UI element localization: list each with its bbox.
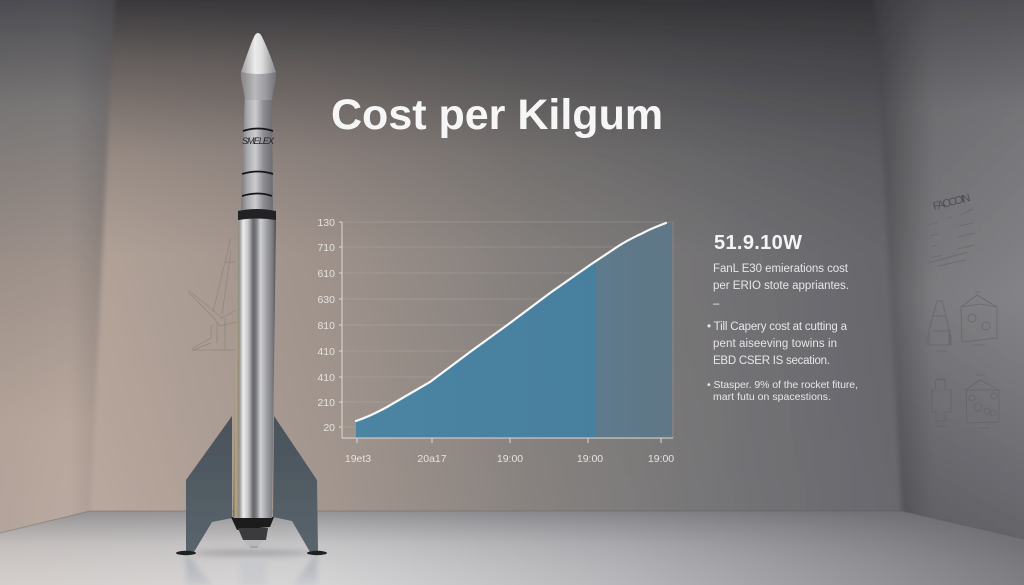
sketch: stage panel [966, 375, 999, 428]
summary text: – [713, 298, 720, 310]
faint blueprint sketch behind rocket [188, 238, 236, 350]
title: Cost per Kilgum [331, 91, 663, 139]
wall sketches on right [927, 192, 999, 428]
x axis labels: 19et3 [345, 453, 371, 465]
collar [238, 209, 276, 220]
sketch: engine panel [961, 292, 997, 345]
rocket reflection on floor [186, 550, 317, 585]
headline figure: 51.9.10W [714, 232, 802, 254]
summary text: FanL E30 emierations cost [713, 263, 849, 275]
side statistic and notes [707, 232, 858, 403]
sketch: capsule [932, 379, 951, 426]
falcon spec sheet [928, 192, 974, 266]
summary text [713, 263, 849, 310]
second bullet: • Stasper. 9% of the rocket fiture, [707, 379, 858, 391]
x axis labels: 19:00 [648, 453, 674, 465]
lighter forecast area [596, 222, 672, 438]
x axis labels: 19:00 [577, 453, 603, 465]
x axis labels: 20a17 [417, 453, 447, 465]
y axis labels: 710 [317, 242, 335, 254]
nose cone [241, 33, 276, 74]
y axis labels: 410 [317, 346, 335, 358]
main body [233, 218, 276, 518]
cost line chart [317, 217, 674, 465]
first bullet [707, 321, 848, 367]
rocket bands [242, 128, 273, 196]
y axis labels: 210 [317, 397, 335, 409]
second bullet: mart futu on spacestions. [713, 391, 831, 403]
first bullet: • Till Capery cost at cutting a [707, 321, 848, 333]
right fin [273, 416, 327, 555]
y axis labels: 410 [317, 372, 335, 384]
first bullet: EBD CSER IS secation. [713, 355, 830, 367]
nose base [241, 72, 276, 100]
y axis labels [317, 217, 335, 434]
grid lines [342, 222, 673, 438]
x axis labels: 19:00 [497, 453, 523, 465]
summary text: per ERIO stote appriantes. [713, 280, 849, 292]
rocket lettering: SMELEX [242, 136, 275, 146]
y axis labels: 630 [317, 294, 335, 306]
upper stage [241, 92, 273, 210]
left fin [176, 416, 232, 555]
x axis labels [345, 453, 674, 465]
y axis labels: 810 [317, 320, 335, 332]
engine nozzle [231, 517, 274, 548]
curve line [356, 223, 666, 421]
y axis labels: 20 [323, 422, 335, 434]
blue area fill [356, 261, 596, 438]
y axis labels: 130 [317, 217, 335, 229]
axes [339, 222, 673, 443]
sketch: rocket stage [927, 301, 951, 351]
second bullet [707, 379, 858, 403]
rocket [176, 33, 327, 555]
first bullet: pent aiseeving towins in [713, 338, 837, 350]
falcon spec sheet: FACCOIN [932, 192, 972, 213]
y axis labels: 610 [317, 268, 335, 280]
